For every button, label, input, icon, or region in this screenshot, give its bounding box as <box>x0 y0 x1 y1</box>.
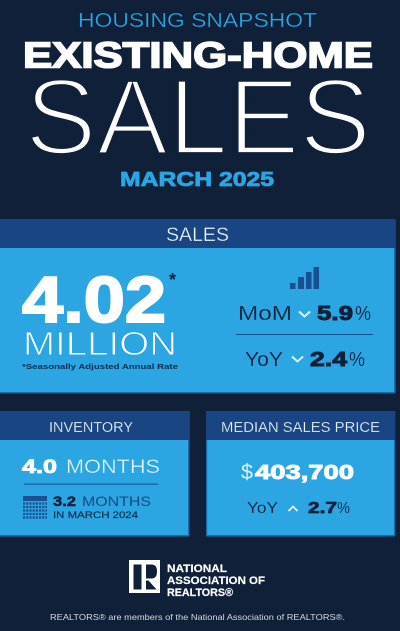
million label: MILLION <box>23 325 177 362</box>
sales header: SALES <box>166 225 229 246</box>
year over year stat: % <box>349 349 365 371</box>
divider line <box>24 484 158 485</box>
prior year months: MONTHS <box>82 493 151 509</box>
price year over year: % <box>337 500 350 517</box>
inventory header: INVENTORY <box>49 419 133 436</box>
sales header <box>0 219 395 248</box>
current months: 4.0 <box>22 457 57 478</box>
organisation name: REALTORS® <box>167 587 233 599</box>
price header: MEDIAN SALES PRICE <box>221 419 380 436</box>
icon: bar signal <box>290 267 319 289</box>
panel: median sales price <box>206 411 395 536</box>
year over year stat <box>245 349 365 371</box>
price year over year: 2.7 <box>308 500 337 517</box>
month over month stat: MoM <box>238 303 292 325</box>
panel: sales <box>0 219 396 394</box>
prior year months: IN MARCH 2024 <box>53 510 138 521</box>
prior year months <box>53 493 151 521</box>
price year over year <box>247 500 350 517</box>
title block <box>23 10 373 191</box>
icon: R block <box>129 560 160 593</box>
heading: sales: SALES <box>25 56 371 177</box>
logo: national association of realtors <box>129 560 265 599</box>
organisation name: ASSOCIATION OF <box>167 575 265 587</box>
current months: MONTHS <box>66 457 160 478</box>
panel: inventory <box>0 411 190 536</box>
inventory header <box>0 411 189 440</box>
price year over year: YoY <box>247 500 278 517</box>
month over month stat: % <box>355 303 371 325</box>
year over year stat: YoY <box>245 349 283 371</box>
icon: calendar <box>23 496 47 518</box>
month over month stat <box>238 303 371 325</box>
current months <box>22 457 160 478</box>
organisation name: NATIONAL <box>167 563 227 575</box>
headline number: 4.02 <box>22 263 166 336</box>
footer note: REALTORS® are members of the National Association of REALTORS®. <box>50 612 345 622</box>
year over year stat: 2.4 <box>310 349 348 371</box>
heading: existing-home: EXISTING-HOME <box>23 34 373 76</box>
divider line <box>236 334 373 335</box>
prior year months: 3.2 <box>53 494 76 509</box>
footnote: *Seasonally Adjusted Annual Rate <box>22 362 178 371</box>
price value: 403,700 <box>255 461 354 484</box>
asterisk: * <box>169 270 176 290</box>
eyebrow heading: HOUSING SNAPSHOT <box>78 10 317 32</box>
organisation name <box>167 563 265 599</box>
month over month stat: 5.9 <box>317 303 353 325</box>
price value: $ <box>241 461 253 484</box>
price header <box>206 411 395 440</box>
price value <box>241 461 354 484</box>
date: MARCH 2025 <box>120 169 274 191</box>
